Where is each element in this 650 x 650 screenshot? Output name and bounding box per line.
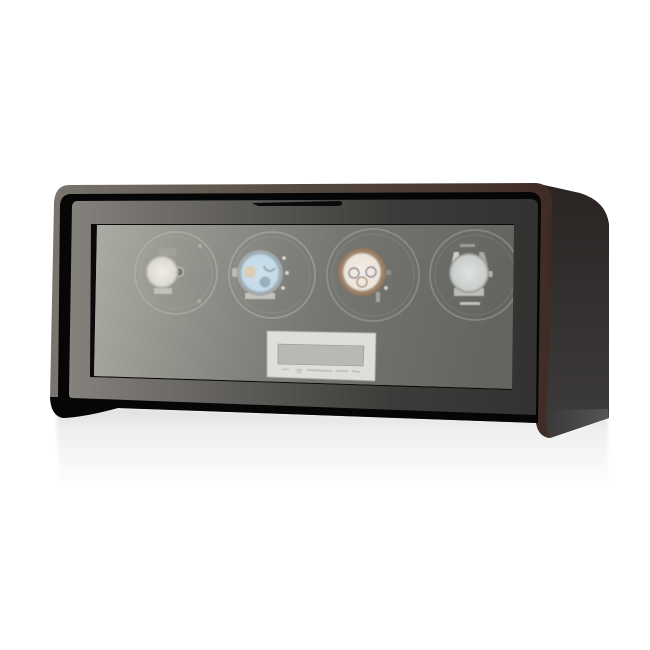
cabinet side panel	[535, 183, 609, 438]
button labels	[282, 369, 360, 373]
LCD control panel	[267, 331, 376, 381]
floor reflection	[56, 408, 608, 490]
cabinet front rim	[50, 183, 552, 438]
winder 4 with watch	[430, 230, 520, 320]
door frame	[69, 199, 538, 415]
side panel lower reflection	[546, 409, 609, 438]
door handle slot	[252, 201, 342, 206]
black recess inside rim	[50, 192, 541, 423]
glass window	[90, 224, 520, 390]
winder 3 with watch	[327, 229, 419, 321]
winder 1 with watch	[135, 232, 217, 314]
winder 2 with watch	[229, 232, 315, 318]
LCD screen	[278, 344, 364, 366]
illustration: four-watch winder cabinet	[50, 183, 609, 458]
